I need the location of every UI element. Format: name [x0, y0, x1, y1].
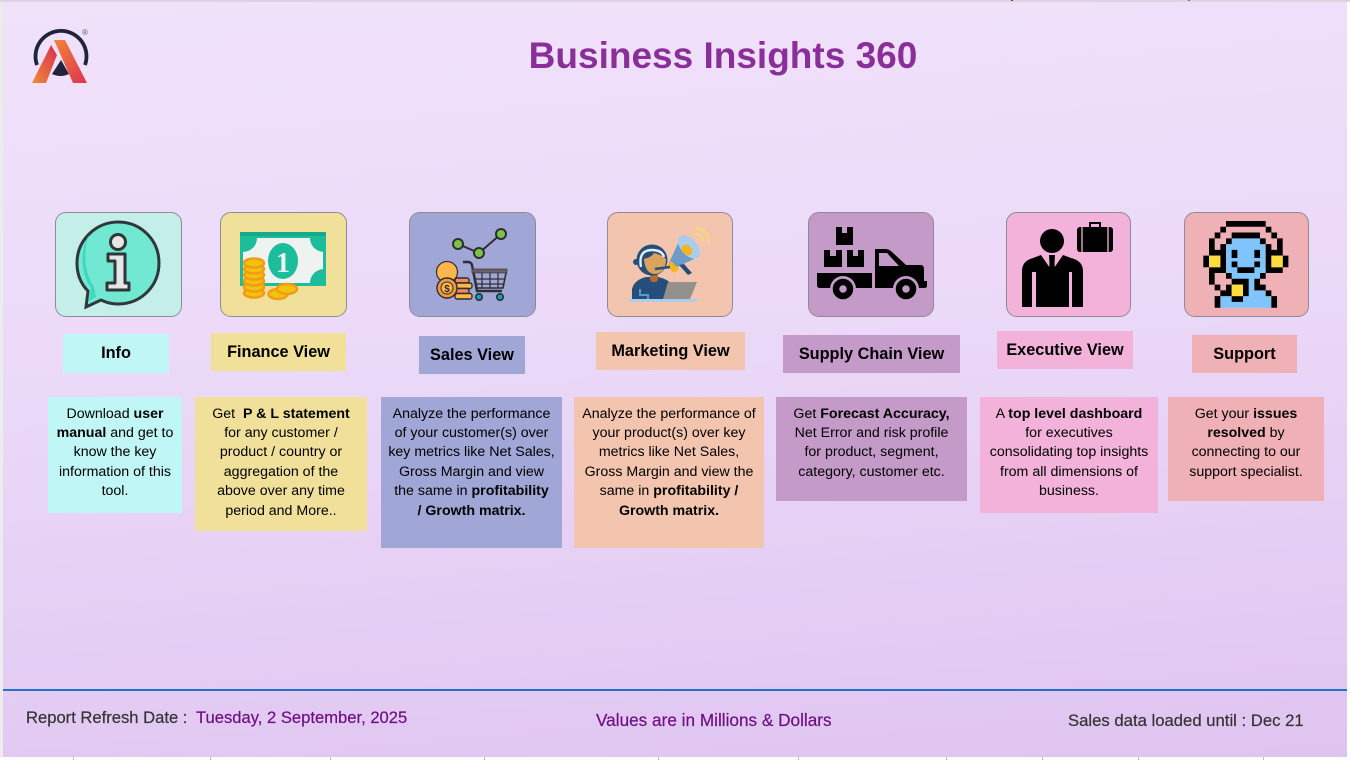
logo	[32, 28, 88, 83]
panel: finance icon	[220, 212, 347, 317]
text block: Supply Chain description: Get Forecast Accuracy,	[793, 406, 950, 422]
icon: chart, coins and cart: $	[444, 284, 450, 295]
label: Info	[63, 334, 169, 373]
text block: Finance description: aggregation of the	[224, 464, 338, 480]
icon: banknote and coins	[240, 232, 326, 300]
icon: agent with megaphone	[629, 226, 710, 302]
text block: Executive description: consolidating top insights	[990, 444, 1148, 460]
text block: Finance description: period and More..	[225, 503, 337, 519]
text block: Finance description	[195, 397, 367, 531]
label: Marketing View	[596, 332, 745, 370]
title: Business Insights 360	[529, 35, 917, 76]
label: Sales View	[419, 336, 525, 374]
icon: executive with briefcase	[1022, 222, 1113, 307]
label: Support	[1192, 335, 1297, 373]
label: Marketing View: Marketing View	[611, 342, 730, 360]
panel: info icon	[55, 212, 182, 317]
text block: Support description: support specialist.	[1189, 464, 1303, 480]
icon: banknote and coins: 1	[276, 248, 290, 279]
panel: sales icon	[409, 212, 536, 317]
text block: Support description: connecting to our	[1192, 444, 1300, 460]
logo: ®	[82, 28, 88, 37]
text block: Info description: manual and get to	[57, 425, 173, 441]
text block: Support description: Get your issues	[1195, 406, 1297, 422]
text block: Supply Chain description	[776, 397, 967, 501]
label: Info: Info	[101, 344, 131, 362]
text block: Info description: information of this	[59, 464, 171, 480]
text block: Info description: tool.	[102, 483, 128, 499]
text block: Supply Chain description: Net Error and risk profile	[795, 425, 948, 441]
text block: Executive description: for executives	[1025, 425, 1113, 441]
footer: values note: Values are in Millions & Dollars	[596, 710, 832, 730]
text block: Finance description: product / country or	[220, 444, 342, 460]
text block: Support description: resolved by	[1207, 425, 1285, 441]
label: Supply Chain View: Supply Chain View	[799, 344, 944, 362]
label: Finance View	[211, 333, 346, 371]
text block: Sales description: Gross Margin and view	[399, 464, 544, 480]
text block: Info description: know the key	[74, 444, 156, 460]
icon: info speech bubble	[76, 220, 160, 310]
text block: Marketing description: Analyze the performance of	[582, 406, 756, 422]
label: Finance View: Finance View	[227, 342, 330, 360]
text block: Info description	[48, 397, 182, 513]
text block: Marketing description: metrics like Net Sales,	[599, 444, 739, 460]
text block: Sales description: / Growth matrix.	[418, 503, 526, 519]
text block: Supply Chain description: category, customer etc.	[798, 464, 945, 480]
text block: Sales description: the same in profitability	[394, 483, 549, 499]
text block: Marketing description	[574, 397, 764, 548]
panel: marketing icon	[607, 212, 733, 317]
label: Executive View: Executive View	[1006, 340, 1124, 358]
text block: Executive description: business.	[1039, 483, 1099, 499]
panel: executive icon	[1006, 212, 1131, 317]
panel: support icon	[1184, 212, 1309, 317]
text block: Sales description: Analyze the performance	[393, 406, 550, 422]
text block: Marketing description: Growth matrix.	[619, 503, 719, 519]
text block: Executive description: A top level dashboard	[996, 406, 1142, 422]
label: Supply Chain View	[783, 335, 960, 373]
text block: Marketing description: same in profitability /	[600, 483, 738, 499]
icon: chart, coins and cart	[436, 228, 508, 301]
text block: Sales description: of your customer(s) over	[395, 425, 548, 441]
panel: supply chain icon	[808, 212, 934, 317]
text block: Sales description: key metrics like Net Sales,	[388, 444, 555, 460]
text block: Finance description: for any customer /	[224, 425, 338, 441]
text block: Support description	[1168, 397, 1324, 501]
footer: report refresh date: Tuesday, 2 September, 2025	[196, 708, 407, 727]
text block: Executive description	[980, 397, 1158, 513]
footer: report refresh date	[26, 708, 407, 727]
text block: Finance description: above over any time	[217, 483, 345, 499]
text block: Marketing description: your product(s) over key	[593, 425, 745, 441]
text block: Executive description: from all dimensions of	[1000, 464, 1138, 480]
label: Sales View: Sales View	[430, 346, 514, 364]
text block: Info description: Download user	[66, 406, 164, 422]
text block: Sales description	[381, 397, 562, 548]
icon: delivery truck	[817, 227, 927, 300]
text block: Finance description: Get P & L statement	[212, 406, 350, 422]
text block: Supply Chain description: for product, segment,	[804, 444, 939, 460]
icon: pixel art support agent	[1203, 221, 1288, 308]
label: Support: Support	[1213, 344, 1276, 362]
label: Executive View	[997, 331, 1133, 369]
text block: Marketing description: Gross Margin and view the	[585, 464, 753, 480]
footer: sales data loaded: Sales data loaded until : Dec 21	[1068, 711, 1304, 730]
footer: report refresh date: Report Refresh Date :	[26, 708, 187, 727]
